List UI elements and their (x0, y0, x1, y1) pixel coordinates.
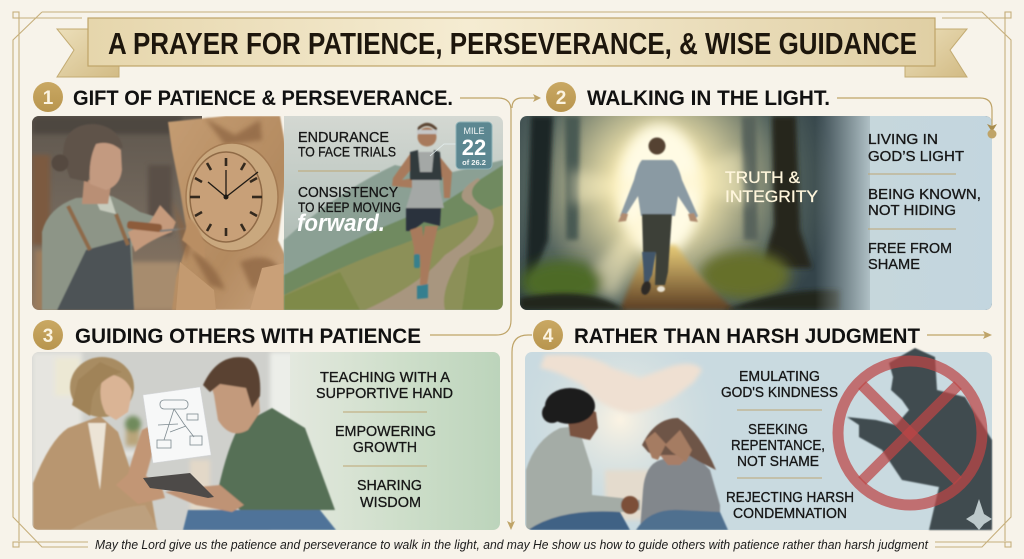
runner (392, 123, 452, 299)
guiding text list: GROWTH (353, 440, 417, 456)
badge 1: 1 (43, 88, 54, 109)
judgment text list: NOT SHAME (737, 454, 819, 470)
guiding text list: TEACHING WITH A (320, 370, 450, 386)
heading 1: GIFT OF PATIENCE & PERSEVERANCE. (73, 87, 453, 110)
judgment text list: SEEKING (748, 422, 808, 438)
panel 4: judgment (525, 352, 992, 530)
woman mentor (33, 357, 165, 530)
heading 3: GUIDING OTHERS WITH PATIENCE (75, 325, 421, 348)
soft room background (525, 352, 992, 530)
forest photo (520, 116, 992, 310)
mile badge: 22 (462, 135, 486, 160)
mile badge: of 26.2 (462, 158, 486, 167)
judgment text list: GOD'S KINDNESS (721, 385, 838, 401)
judgment text list: REJECTING HARSH (726, 490, 854, 506)
harsh silhouette (847, 348, 992, 530)
badge 1 (33, 82, 63, 112)
connector arrows (430, 94, 997, 530)
truth and integrity label: INTEGRITY (725, 187, 818, 206)
badge 2 (546, 82, 576, 112)
judgment text list: REPENTANCE, (731, 438, 825, 454)
heading 4: RATHER THAN HARSH JUDGMENT (574, 325, 920, 348)
consistency text: forward. (297, 210, 385, 237)
light benefit list: SHAME (868, 257, 920, 273)
seated woman (526, 388, 640, 530)
panel 3: guiding (32, 352, 500, 530)
badge 4 (533, 320, 563, 350)
judgment text list: CONDEMNATION (733, 506, 847, 522)
divine open hand (540, 355, 702, 413)
sparkle mark (966, 499, 992, 530)
light benefit list: GOD’S LIGHT (868, 149, 964, 165)
endurance text: TO FACE TRIALS (298, 144, 396, 160)
mile badge: MILE (463, 126, 485, 136)
consistency text: TO KEEP MOVING (298, 200, 401, 215)
heading 2: WALKING IN THE LIGHT. (587, 87, 830, 110)
distressed woman (636, 418, 728, 530)
judgment text list: EMULATING (739, 369, 820, 385)
panel 2: light (520, 116, 992, 310)
guiding text list: SHARING (357, 478, 422, 494)
mile badge (430, 122, 492, 169)
light benefit list: LIVING IN (868, 132, 938, 148)
workshop photo (32, 116, 202, 310)
endurance text (298, 132, 396, 157)
badge 2: 2 (556, 88, 566, 109)
badge 4: 4 (543, 326, 554, 347)
truth and integrity label (725, 171, 818, 202)
prohibition sign (838, 361, 982, 505)
trail landscape (284, 116, 503, 310)
guiding text list: SUPPORTIVE HAND (316, 386, 453, 402)
room background (32, 352, 500, 530)
endurance text: ENDURANCE (298, 130, 389, 146)
light benefit list: NOT HIDING (868, 203, 956, 219)
young man (165, 357, 336, 530)
title banner (57, 18, 967, 77)
badge 3: 3 (43, 326, 53, 347)
truth and integrity label: TRUTH & (725, 168, 801, 187)
guiding text list: EMPOWERING (335, 424, 436, 440)
consistency text: CONSISTENCY (298, 185, 398, 201)
light benefit list (868, 132, 981, 273)
panel 1: patience (32, 116, 503, 310)
carved wooden clock (168, 116, 292, 310)
closing prayer line: May the Lord give us the patience and perseverance to walk in the light, and may He show us how to guide others with patience rather than harsh judgment (95, 537, 929, 552)
tablet (143, 473, 214, 498)
guiding text list (316, 370, 453, 511)
judgment text list (721, 369, 854, 522)
light benefit list: FREE FROM (868, 241, 952, 257)
consistency text (298, 186, 400, 231)
guiding text list: WISDOM (360, 495, 421, 511)
light benefit list: BEING KNOWN, (868, 187, 981, 203)
figure walking into light (618, 138, 698, 296)
paper diagram (143, 387, 211, 463)
badge 3 (33, 320, 63, 350)
